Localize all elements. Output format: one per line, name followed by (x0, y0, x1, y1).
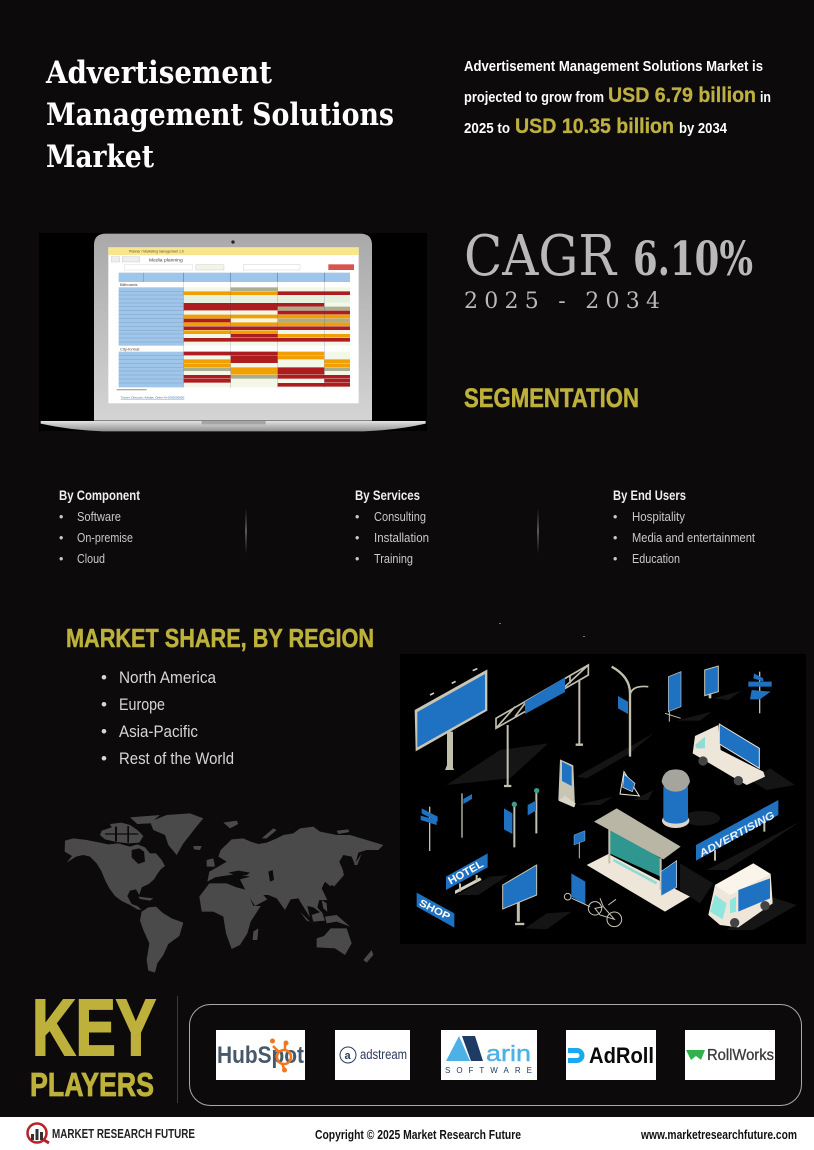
segment: by end users: • (613, 552, 617, 566)
market share heading: MARKET SHARE, BY REGION (66, 623, 374, 653)
segment: by services: • (355, 510, 359, 524)
banner stand (665, 672, 681, 722)
large billboard (415, 669, 487, 770)
CAGR: 2025 - 2034 (464, 289, 660, 314)
logo: hubspot: HubSpot (217, 1042, 304, 1069)
CAGR (464, 224, 753, 314)
segment: by services: Consulting (374, 510, 426, 524)
region list: • (101, 695, 107, 714)
logo: marin software: arin (486, 1041, 531, 1066)
left signs (421, 788, 585, 858)
segment: by component: • (59, 552, 63, 566)
footer (0, 1117, 814, 1150)
segment: by component: Cloud (77, 552, 105, 566)
region list: Rest of the World (119, 749, 234, 768)
key players panel (190, 1004, 802, 1106)
shop sign: SHOP (417, 898, 452, 923)
truck (693, 724, 765, 785)
logo: adroll (566, 1030, 656, 1080)
laptop body (94, 234, 372, 421)
key players heading: PLAYERS (30, 1066, 154, 1103)
region list (101, 668, 234, 768)
footer: MARKET RESEARCH FUTURE (52, 1126, 195, 1141)
title: Advertisement (45, 55, 273, 91)
title (45, 55, 394, 175)
laptop screen (108, 247, 359, 403)
segment: by component (59, 488, 140, 566)
shop sign (417, 893, 454, 928)
segment: by component: Software (77, 510, 121, 524)
logo: adroll: AdRoll (589, 1043, 654, 1068)
segment: by end users: Hospitality (632, 510, 686, 524)
gantry billboard (496, 665, 588, 786)
schedule cells (184, 291, 350, 387)
small screen (705, 666, 718, 698)
laptop image (39, 233, 427, 431)
segment: by component: On-premise (77, 531, 133, 545)
advertising column (662, 769, 690, 828)
segment: by end users: Media and entertainment (632, 531, 755, 545)
laptop screen: City-format (120, 346, 140, 351)
logo: hubspot (216, 1030, 305, 1080)
region list: • (101, 722, 107, 741)
bus shelter (587, 808, 690, 912)
segment: by end users (613, 488, 755, 566)
laptop screen: Transit: Discount, Adidas, Order Nr 0000000000 (121, 395, 185, 399)
segment: by services: Installation (374, 531, 429, 545)
segment: by services: Training (374, 552, 413, 566)
region list: Europe (119, 695, 165, 714)
footer logo (28, 1124, 49, 1143)
market size summary: in (760, 89, 771, 106)
market size summary: USD 10.35 billion (515, 114, 674, 138)
market size summary: 2025 to (464, 120, 510, 137)
logo: rollworks (685, 1030, 775, 1080)
hotel sign: HOTEL (446, 858, 486, 887)
market size summary: by 2034 (679, 120, 728, 137)
key players heading (30, 983, 156, 1103)
region list: • (101, 749, 107, 768)
advertising sign (696, 800, 778, 861)
segment: by services: By Services (355, 488, 420, 503)
CAGR: CAGR (464, 224, 618, 289)
advertising illustration (400, 654, 806, 944)
kiosk (558, 759, 576, 807)
region list: • (101, 668, 107, 687)
market size summary: USD 6.79 billion (608, 83, 756, 107)
market size summary (464, 58, 771, 138)
segment: by end users: Education (632, 552, 680, 566)
direction sign (748, 672, 772, 713)
logo: adstream: a (344, 1050, 352, 1062)
hotel sign (446, 853, 488, 894)
segment: by component: • (59, 531, 63, 545)
segment: by component: • (59, 510, 63, 524)
market size summary: projected to grow from (464, 89, 604, 106)
logo: adstream: adstream (360, 1047, 407, 1062)
region list: Asia-Pacific (119, 722, 198, 741)
market size summary: Advertisement Management Solutions Market is (464, 58, 763, 75)
CAGR: 6.10% (633, 232, 753, 287)
segment: by end users: By End Users (613, 488, 686, 503)
van (708, 863, 773, 927)
segment: by services (355, 488, 429, 566)
bicycle with sign (564, 873, 622, 927)
world map (65, 813, 383, 973)
logo: marin software: SOFTWARE (445, 1066, 532, 1075)
laptop base (41, 421, 426, 431)
title: Market (46, 139, 155, 175)
footer: Copyright © 2025 Market Research Future (315, 1128, 521, 1142)
laptop screen: Planner / Marketing management 1.0 (129, 249, 184, 253)
logo: adstream (335, 1030, 410, 1080)
region list: North America (119, 668, 216, 687)
segment: by component: By Component (59, 488, 140, 503)
laptop screen: Media planning (149, 257, 183, 263)
title: Management Solutions (46, 97, 394, 133)
key players heading: KEY (32, 983, 156, 1072)
segment: by end users: • (613, 510, 617, 524)
small billboard (503, 865, 537, 924)
segment: by services: • (355, 531, 359, 545)
a-frame board (620, 772, 639, 796)
segmentation heading: SEGMENTATION (464, 383, 639, 413)
logo: rollworks: RollWorks (707, 1047, 774, 1064)
segment: by end users: • (613, 531, 617, 545)
segment: by services: • (355, 552, 359, 566)
logo: marin software (441, 1030, 537, 1080)
street lamp (612, 667, 648, 757)
advertising sign: ADVERTISING (696, 809, 777, 861)
laptop screen: Billboards (120, 282, 138, 287)
